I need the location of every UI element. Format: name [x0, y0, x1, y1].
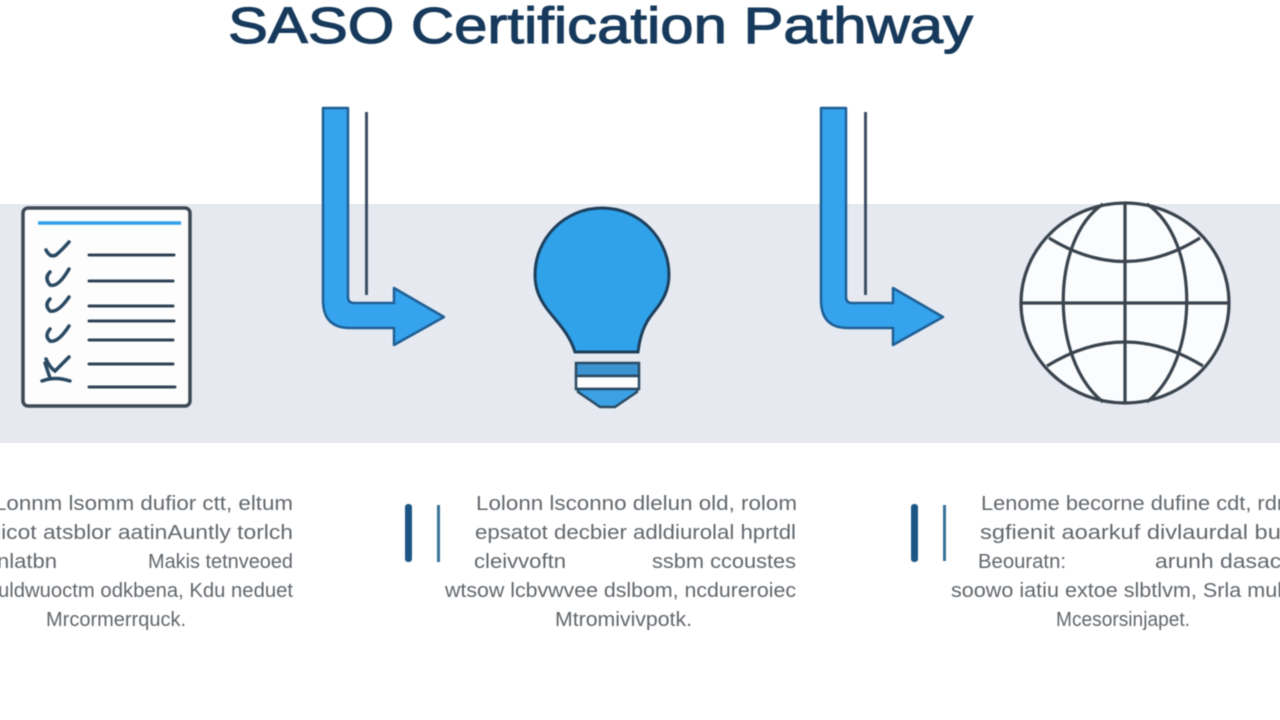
text block: step 2 description: wtsow lcbvwvee dslbom, ncdureroiec [444, 580, 796, 602]
decorative bars: step 3 marker [911, 504, 946, 562]
text block: step 3 description: sgfienit aoarkuf divlaurdal bun [980, 522, 1280, 544]
text block: step 1 description: Mrcormerrquck. [46, 609, 186, 631]
icon: globe [1021, 203, 1229, 403]
decorative bars: step 2 marker [405, 504, 440, 562]
text block: step 3 description: Beouratn: [978, 551, 1066, 573]
text block: step 2 description: cleivvoftn [474, 551, 566, 573]
text block: step 3 description: Mcesorsinjapet. [1056, 609, 1190, 631]
text block: step 3 description: soowo iatiu extoe slbtlvm, Srla mulo [951, 580, 1280, 602]
icon: light bulb [535, 208, 669, 407]
text block: step 3 description: arunh dasacd [1155, 551, 1280, 573]
text block: step 2 description: Lolonn lsconno dlelun old, rolom [476, 493, 797, 515]
text block: step 2 description: epsatot decbier adldiurolal hprtdl [475, 522, 796, 544]
text block: step 2 description: Mtromivivpotk. [555, 609, 692, 631]
arrow: step 2 to step 3 [821, 108, 943, 345]
text block: step 1 description: Makis tetnveoed [148, 551, 293, 573]
text block: step 3 description [951, 493, 1280, 631]
text block: step 2 description: ssbm ccoustes [652, 551, 796, 573]
text block: step 1 description: licot atsblor aatinAuntly torlch [0, 522, 293, 544]
background band [0, 204, 1280, 443]
arrow: step 1 to step 2 [323, 108, 444, 345]
icon: checklist [23, 208, 190, 406]
text block: step 1 description [0, 493, 293, 631]
text block: step 1 description: uldwuoctm odkbena, Kdu neduet [0, 580, 293, 602]
text block: step 3 description: Lenome becorne dufine cdt, rdm [981, 493, 1280, 515]
text block: step 1 description: Lonnm lsomm dufior ctt, eltum [0, 493, 293, 515]
text block: step 2 description [444, 493, 797, 631]
